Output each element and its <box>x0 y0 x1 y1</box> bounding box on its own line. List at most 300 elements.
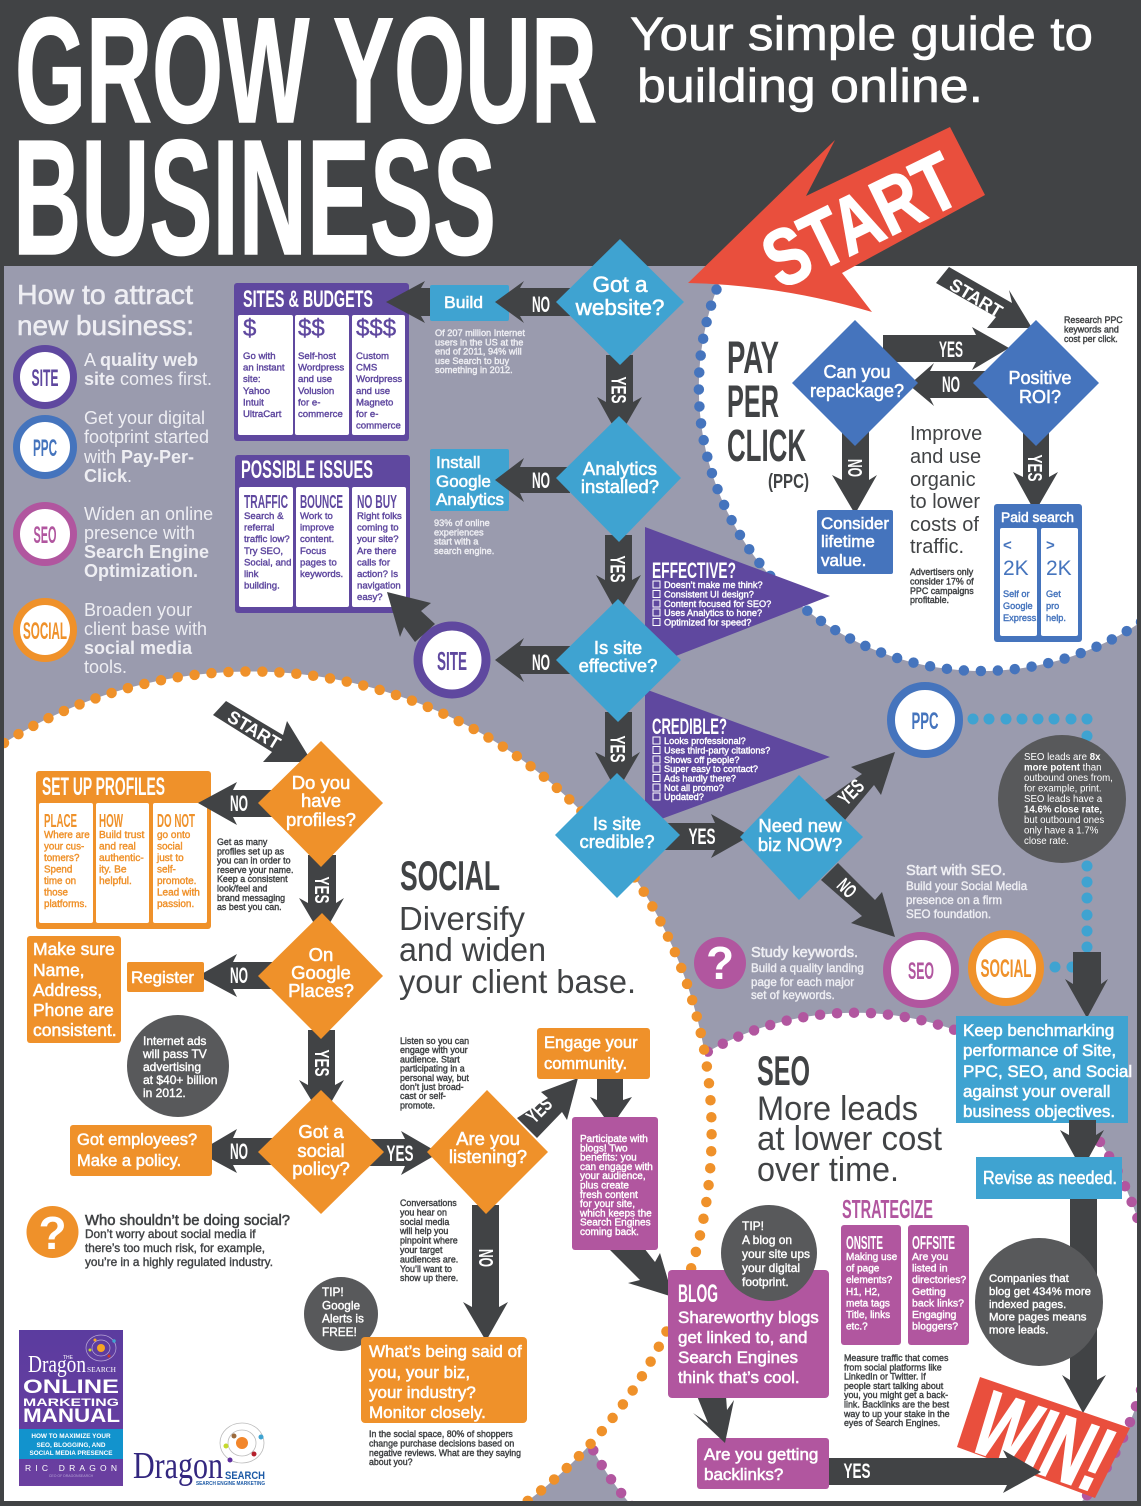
book cover: MANUAL <box>23 1406 120 1427</box>
text: profile advice: as best you can. <box>217 902 282 912</box>
text: start with seo: SEO foundation. <box>906 908 991 921</box>
heading: POSSIBLE ISSUES <box>241 456 373 484</box>
box: participate with blogs: blogs! Two <box>580 1143 628 1154</box>
box: make sure consistent: Address, <box>33 980 102 1000</box>
card: place <box>39 803 93 923</box>
arrow: no build <box>495 281 570 323</box>
callout: tip alerts <box>304 1277 378 1351</box>
card: mid budget <box>295 315 349 435</box>
callout: credible checklist: Ads hardly there? <box>664 774 736 784</box>
callout: seo leads: 8x <box>1090 752 1101 763</box>
text: improve organic: organic <box>910 469 976 491</box>
card: do not: go onto <box>157 830 191 841</box>
box: participate with blogs: coming back. <box>580 1227 639 1238</box>
callout: effective checklist: Consistent UI design? <box>664 590 754 600</box>
card: offsite: bloggers? <box>912 1321 958 1333</box>
box: make sure consistent: Phone are <box>33 1000 114 1020</box>
arrow: ppc no: NO <box>942 372 960 397</box>
arrow: yes to win: YES <box>844 1460 870 1483</box>
box: participate with blogs: benefits: you <box>580 1153 637 1164</box>
arrow: no profiles <box>198 782 275 825</box>
arrow: yes policy: YES <box>386 1141 414 1166</box>
card: bounce: content. <box>300 534 334 545</box>
arrow: to benchmarking <box>1065 952 1108 1018</box>
text: profile advice: reserve your name. <box>217 865 293 875</box>
text: advertisers stat: profitable. <box>910 595 949 605</box>
text: conversations advice: will help you <box>399 1226 448 1236</box>
text: site intro: A <box>84 350 100 370</box>
diamond: positive roi: Positive <box>1008 368 1072 388</box>
label: yes: YES <box>606 376 630 404</box>
arrow: yes analytics <box>596 535 641 615</box>
panel: social white area <box>4 671 712 1501</box>
book cover: Dragon <box>28 1352 86 1378</box>
card: no buy: Are there <box>357 546 396 557</box>
diamond: is site effective: Is site <box>594 637 642 658</box>
text: engine stat: search engine. <box>434 546 494 556</box>
box: blog: get linked to, and <box>678 1328 807 1347</box>
card: place: tomers? <box>44 853 80 864</box>
callout: seo leads: SEO leads have a <box>1024 794 1103 805</box>
heading: pay per click <box>727 332 809 493</box>
callout: seo leads <box>998 735 1126 863</box>
card: over 2k: 2K <box>1046 557 1072 580</box>
heading: social: your client base. <box>399 963 636 1000</box>
text: measure traffic: Measure traffic that comes <box>844 1353 949 1363</box>
panel: ppc white area <box>699 105 1141 671</box>
box: what's being said: Monitor closely. <box>369 1403 486 1422</box>
icon: site badge: SITE <box>32 365 58 392</box>
box: blog: Search Engines <box>678 1348 798 1367</box>
arrow: yes need new biz <box>825 752 895 820</box>
icon: ppc circle: PPC <box>912 708 938 735</box>
card: offsite: back links? <box>912 1297 964 1309</box>
callout: effective checklist: Doesn’t make me think? <box>664 580 763 590</box>
card: how: authentic- <box>99 853 144 864</box>
diamond: got a website: website? <box>575 295 664 320</box>
box: what's being said: you, your biz, <box>369 1363 470 1382</box>
card: onsite <box>841 1225 901 1345</box>
card: no buy: navigation <box>357 581 401 592</box>
callout: credible checklist: Updated? <box>664 792 704 802</box>
arrow: no profiles: NO <box>230 791 248 816</box>
text: engine stat: 93% of online <box>434 518 490 528</box>
box: consider lifetime value: lifetime <box>821 532 875 551</box>
diamond: are you listening: listening? <box>449 1146 527 1167</box>
card: offsite: OFFSITE <box>912 1233 955 1253</box>
heading: seo: SEO <box>757 1047 810 1094</box>
arrow: no effective <box>495 638 570 682</box>
arrow: no analytics: NO <box>532 468 550 493</box>
text: ppc intro: . <box>127 466 132 486</box>
callout: internet ads: will pass TV <box>142 1047 207 1061</box>
box: build: Build <box>444 293 483 312</box>
diamond: do you have profiles <box>258 741 383 867</box>
box: keep benchmarking: business objectives. <box>963 1102 1115 1121</box>
card: low budget: $ <box>243 315 256 342</box>
callout: tip blog: footprint. <box>742 1275 789 1289</box>
arrow: social start <box>213 701 312 762</box>
text: listen advice: promote. <box>400 1100 435 1110</box>
heading: how to attract: How to attract <box>17 279 193 310</box>
box: revise as needed: Revise as needed. <box>983 1168 1117 1188</box>
subtitle: Your simple guide to <box>630 7 1093 60</box>
text: social intro: tools. <box>84 657 127 677</box>
label: yes: YES <box>606 556 628 582</box>
box: build <box>430 285 509 321</box>
panel: set up profiles <box>36 771 211 929</box>
card: over 2k: Get <box>1046 589 1061 599</box>
arrow: yes need new biz: YES <box>834 775 869 810</box>
card: no buy <box>352 487 406 607</box>
arrow: no need new biz <box>821 863 895 937</box>
callout: seo leads: close rate. <box>1024 836 1069 847</box>
arrow: no policy <box>198 1129 275 1173</box>
diamond: need new biz: biz NOW? <box>758 834 842 855</box>
box: blog: Shareworthy blogs <box>678 1308 819 1327</box>
text: improve organic: and use <box>910 446 981 468</box>
callout: tip blog: A blog on <box>742 1233 792 1247</box>
callout: seo leads: SEO leads are <box>1024 752 1090 763</box>
box: make sure consistent: consistent. <box>33 1020 117 1040</box>
icon: ppc badge: PPC <box>33 435 57 462</box>
card: high budget: CMS <box>356 363 377 374</box>
card: onsite: Making use <box>846 1252 898 1263</box>
text: who shouldn't: Don’t worry about social media if <box>85 1227 256 1241</box>
arrow: repackage no: NO <box>843 459 865 477</box>
text: improve organic: Improve <box>910 423 982 445</box>
text: improve organic: traffic. <box>910 536 964 558</box>
text: listen advice: Listen so you can <box>400 1036 469 1046</box>
text: study keywords: page for each major <box>751 976 854 989</box>
box: are you getting backlinks: backlinks? <box>704 1465 783 1484</box>
card: high budget: and use <box>356 386 390 397</box>
connector: ppc dots <box>968 714 1092 972</box>
callout: tip alerts: FREE! <box>322 1325 357 1339</box>
arrow: roi yes <box>1013 430 1058 512</box>
text: who shouldn't: Who shouldn’t be doing social? <box>85 1213 290 1229</box>
arrow: big red start: START <box>749 135 972 305</box>
icon: seo circle: SEO <box>908 958 934 985</box>
text: search stat: something in 2012. <box>435 365 513 375</box>
text: ppc intro: Click <box>84 466 128 486</box>
card: do not: passion. <box>157 899 194 910</box>
heading: pay per click: CLICK <box>727 420 806 471</box>
diamond: need new biz <box>740 775 863 900</box>
arrow: yes policy <box>365 1131 439 1175</box>
card: do not: DO NOT <box>157 811 195 831</box>
arrow: blog to backlinks <box>693 1396 734 1443</box>
callout: companies that blog: More pages means <box>989 1312 1087 1324</box>
arrow: no listening <box>463 1205 508 1341</box>
card: over 2k <box>1041 528 1078 636</box>
card: under 2k: < <box>1003 537 1012 554</box>
card: offsite: listed in <box>912 1263 948 1275</box>
callout: companies that blog: Companies that <box>989 1273 1070 1285</box>
callout: internet ads: at $40+ billion <box>143 1073 217 1087</box>
diamond: need new biz: Need new <box>758 815 842 836</box>
card: onsite: Title, links <box>846 1310 890 1321</box>
subtitle <box>630 7 1093 112</box>
card: offsite: Are you <box>912 1251 948 1263</box>
callout: credible checklist: CREDIBLE? <box>652 714 727 739</box>
callout: seo leads: outbound ones from, <box>1024 773 1113 784</box>
callout: credible checklist: Looks professional? <box>664 736 746 746</box>
text: profile advice: profiles set up as <box>217 846 285 856</box>
diamond: analytics installed: Analytics <box>583 458 657 479</box>
card: bounce: pages to <box>300 557 337 568</box>
card: do not: Lead with <box>157 888 200 898</box>
arrow: engage to participate <box>590 1075 632 1127</box>
diamond: is site credible <box>555 773 680 898</box>
callout: companies that blog <box>975 1238 1103 1366</box>
text: improve organic: costs of <box>910 514 979 536</box>
text: study keywords: Build a quality landing <box>751 962 864 975</box>
card: do not: self- <box>157 864 176 876</box>
card: low budget: UltraCart <box>243 409 282 420</box>
card: do not: just to <box>156 853 184 864</box>
icon: ppc badge <box>16 418 74 476</box>
diamond: are you listening <box>427 1090 548 1214</box>
box: participate with blogs: Participate with <box>580 1134 648 1145</box>
arrow: yes listening: YES <box>522 1093 557 1128</box>
text: ppc intro: Get your digital <box>84 408 205 428</box>
logo: dragonsearch: SEARCH <box>225 1470 265 1482</box>
callout: tip alerts: Alerts is <box>322 1312 364 1326</box>
text: conversations advice: pinpoint where <box>400 1236 458 1246</box>
card: do not: social <box>157 842 183 852</box>
diamond: got a website: Got a <box>592 272 648 297</box>
text: measure traffic: link. Backlinks are the best <box>844 1400 950 1410</box>
logo: dragonsearch <box>133 1423 265 1487</box>
callout: seo leads: than <box>1080 762 1102 774</box>
card: low budget <box>238 315 293 435</box>
box: install analytics: Google <box>436 472 491 491</box>
card: no buy: coming to <box>357 523 399 534</box>
card: bounce: improve <box>300 523 334 534</box>
card: no buy: your site? <box>357 534 399 545</box>
logo: dragonsearch: Dragon <box>133 1445 223 1487</box>
card: how: helpful. <box>99 876 132 887</box>
heading: seo <box>757 1047 943 1189</box>
box: make sure consistent: Make sure <box>33 939 115 959</box>
diamond: are you listening: Are you <box>456 1128 520 1149</box>
callout: credible checklist: Not all promo? <box>664 783 724 793</box>
callout: companies that blog: blog get 434% more <box>989 1286 1091 1298</box>
text: who shouldn't: there’s too much risk, for example, <box>85 1241 265 1255</box>
callout: seo leads: only have a 1.7% <box>1024 826 1099 836</box>
callout: credible checklist: Super easy to contact? <box>664 764 758 774</box>
heading: social: Diversify <box>399 900 525 937</box>
text: seo intro: Search Engine <box>84 542 209 562</box>
card: bounce: keywords. <box>300 569 343 580</box>
text: profile advice: look/feel and <box>217 884 267 894</box>
diamond: positive roi: ROI? <box>1019 387 1061 407</box>
arrow: yes listening <box>517 1078 578 1138</box>
text: listen advice: audience. Start <box>400 1054 460 1064</box>
card: high budget: Wordpress <box>356 374 402 385</box>
subtitle: building online. <box>637 59 983 112</box>
book cover: SEO, BLOGGING, AND <box>36 1442 106 1449</box>
book cover: SOCIAL MEDIA PRESENCE <box>29 1450 113 1457</box>
card: no buy: easy? <box>357 592 383 603</box>
text: conversations advice: your target <box>400 1245 443 1255</box>
diamond: on google places: On <box>309 944 333 965</box>
callout: tip alerts: TIP! <box>322 1285 344 1299</box>
heading: seo: More leads <box>757 1090 918 1128</box>
card: traffic: Try SEO, <box>244 546 283 557</box>
text: profile advice: Keep a consistent <box>217 874 288 884</box>
box: blog: BLOG <box>678 1280 718 1308</box>
card: under 2k: 2K <box>1003 557 1029 580</box>
card: under 2k: Google <box>1003 601 1033 611</box>
text: study keywords: Study keywords. <box>751 945 858 961</box>
box: consider lifetime value <box>817 510 893 574</box>
book cover: RIC DRAGON <box>25 1463 117 1473</box>
text: search stat: use Search to buy <box>435 356 509 366</box>
card: high budget <box>352 315 405 435</box>
box: consider lifetime value: value. <box>821 551 866 570</box>
box: register: Register <box>131 968 194 987</box>
text: conversations advice: audiences are. <box>400 1254 458 1264</box>
heading: pay per click: PER <box>727 376 779 427</box>
box: participate with blogs: for your site, <box>580 1199 635 1210</box>
card: onsite: ONSITE <box>846 1233 883 1253</box>
icon: book planets <box>86 1335 116 1361</box>
arrow: site to no buy <box>387 592 435 642</box>
text: ppc intro: footprint started <box>84 427 209 447</box>
arrow: yes places <box>299 1030 344 1118</box>
panel: paid search <box>994 504 1082 642</box>
box: register <box>127 962 204 992</box>
text: shoppers stat: negative reviews. What are they saying <box>369 1448 521 1458</box>
card: onsite: etc.? <box>846 1322 868 1333</box>
box: are you getting backlinks: Are you getting <box>704 1445 818 1464</box>
card: mid budget: Self-host <box>298 351 336 362</box>
card: how: HOW <box>99 811 123 831</box>
text: listen advice: engage with your <box>400 1045 468 1055</box>
heading: seo: at lower cost <box>757 1120 943 1158</box>
diamond: got a social policy: Got a <box>298 1121 344 1142</box>
card: place: your cus- <box>44 842 84 852</box>
text: study keywords: set of keywords. <box>751 989 835 1002</box>
card: traffic: Social, and <box>244 557 291 568</box>
box: got employees: Got employees? <box>77 1131 197 1149</box>
text: conversations advice: social media <box>400 1217 449 1227</box>
diamond: positive roi <box>973 320 1099 446</box>
icon: seo circle <box>887 936 955 1004</box>
label: yes: YES <box>606 736 628 762</box>
icon: social badge <box>16 602 74 658</box>
card: bounce: BOUNCE <box>300 492 343 512</box>
heading: social: and widen <box>399 931 546 968</box>
heading: social: SOCIAL <box>400 852 500 899</box>
card: traffic <box>239 487 293 607</box>
text: measure traffic: eyes of Search Engines. <box>844 1418 940 1428</box>
callout: tip blog <box>721 1205 817 1301</box>
text: engine stat: start with a <box>434 537 479 547</box>
heading: social <box>399 852 636 1000</box>
diamond: on google places: Places? <box>288 980 354 1001</box>
card: mid budget: Volusion <box>298 386 334 397</box>
card: high budget: Custom <box>356 351 389 362</box>
diamond: on google places: Google <box>291 962 351 983</box>
arrow: to revise <box>1060 1120 1104 1170</box>
text: seo intro: Widen an online <box>84 504 213 524</box>
card: bounce <box>296 487 349 607</box>
callout: internet ads: Internet ads <box>143 1034 206 1048</box>
book cover: CEO OF DRAGONSEARCH <box>49 1474 94 1478</box>
arrow: no places <box>198 954 275 997</box>
text: measure traffic: LinkedIn or Twitter. If <box>844 1372 926 1382</box>
diamond: do you have profiles: have <box>301 790 341 811</box>
box: participate with blogs: Search Engines <box>580 1218 651 1229</box>
diamond: is site credible: Is site <box>593 813 641 834</box>
panel: possible issues <box>235 455 410 613</box>
card: place: time on <box>44 876 76 887</box>
card: how: ity. Be <box>99 864 127 876</box>
diamond: got a social policy: policy? <box>292 1158 350 1179</box>
box: blog: think that’s cool. <box>678 1368 800 1387</box>
card: onsite: of page <box>846 1264 880 1275</box>
box: keep benchmarking: against your overall <box>963 1082 1110 1101</box>
card: high budget: for e- <box>356 409 378 420</box>
diamond: on google places <box>258 913 383 1039</box>
text: ppc intro: with <box>83 447 121 467</box>
card: onsite: meta tags <box>846 1298 890 1309</box>
card: no buy: Right folks <box>357 511 402 522</box>
callout: effective checklist: EFFECTIVE? <box>652 558 736 583</box>
text: listen advice: participating in a <box>400 1064 465 1074</box>
icon: social circle: SOCIAL <box>980 955 1032 983</box>
title <box>13 0 597 289</box>
card: onsite: H1, H2, <box>846 1287 880 1298</box>
panel: paid search: Paid search <box>1001 509 1074 525</box>
diamond: is site credible: credible? <box>579 831 655 852</box>
arrow: social start: START <box>224 706 284 754</box>
box: blog <box>668 1270 829 1398</box>
arrow: no effective: NO <box>532 650 550 675</box>
heading: SITES & BUDGETS <box>243 286 373 313</box>
text: seo intro: Optimization. <box>84 561 198 581</box>
text: social intro: client base with <box>84 619 207 639</box>
book cover: ONLINE <box>23 1377 119 1398</box>
box: engage community <box>537 1028 650 1079</box>
text: shoppers stat: In the social space, 80% of shoppers <box>369 1429 513 1439</box>
heading: how to attract <box>17 279 194 341</box>
callout: effective checklist: Uses Analytics to hone? <box>664 608 762 618</box>
arrow: no listening: NO <box>474 1249 496 1267</box>
arrow: revise to win <box>1062 1195 1106 1413</box>
text: research ppc: cost per click. <box>1064 334 1118 344</box>
card: place: platforms. <box>44 899 87 910</box>
card: under 2k <box>1000 528 1039 636</box>
diamond: analytics installed: installed? <box>581 476 659 497</box>
text: advertisers stat: PPC campaigns <box>910 586 974 596</box>
card: high budget: Magneto <box>356 397 393 408</box>
arrow: yes effective <box>595 712 640 792</box>
heading: seo: over time. <box>757 1151 899 1189</box>
text: measure traffic: from social platforms like <box>844 1362 942 1372</box>
text: profile advice: brand messaging <box>217 893 285 903</box>
callout: tip blog: your digital <box>742 1261 800 1275</box>
diamond: can you repackage <box>792 320 918 446</box>
arrow: roi yes: YES <box>1023 454 1045 482</box>
icon: seo badge: SEO <box>34 522 56 549</box>
diamond: can you repackage: repackage? <box>810 381 904 401</box>
arrow: no build: NO <box>532 292 550 317</box>
arrow: no analytics <box>495 458 570 502</box>
